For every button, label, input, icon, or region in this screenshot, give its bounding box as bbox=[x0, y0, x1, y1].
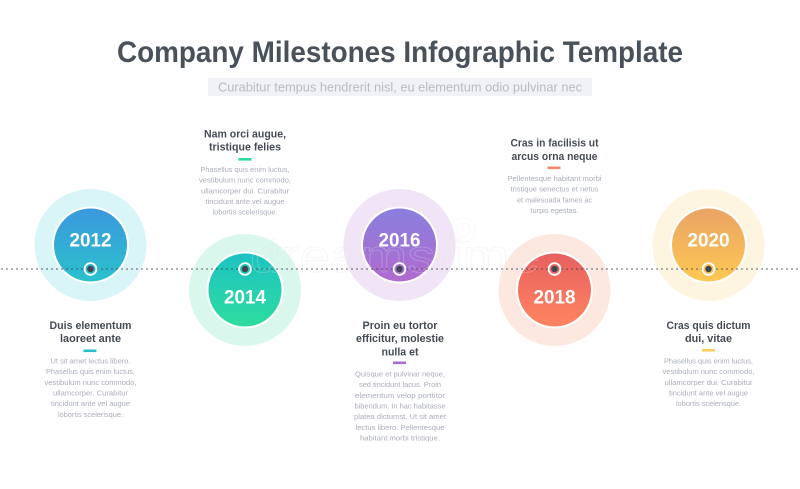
text block: 2018: arcus orna neque bbox=[512, 151, 598, 163]
text block: 2016: sed tincidunt lacus. Proin bbox=[359, 380, 441, 389]
text block: 2014: Nam orci augue, bbox=[204, 128, 286, 140]
text block: 2016: bibendum. In hac habitasse bbox=[354, 402, 446, 410]
watermark bbox=[250, 218, 540, 282]
text block: 2012: ullamcorper. Curabitur bbox=[53, 388, 129, 398]
milestone circle: 2020: 2020 bbox=[688, 231, 730, 252]
text block: 2014: Phasellus quis enim luctus, bbox=[200, 165, 290, 174]
text block: 2016: Quisque et pulvinar neque, bbox=[355, 370, 445, 378]
text block: 2018: turpis egestas. bbox=[530, 206, 578, 215]
text block: 2020: vestibulum nunc commodo, bbox=[662, 367, 754, 376]
text block: 2016: lectus libero. Pellentesque bbox=[356, 423, 444, 432]
text block: 2012: vestibulum nunc commodo, bbox=[44, 378, 136, 387]
text block: 2018: Cras in facilisis ut bbox=[510, 138, 599, 150]
text block: 2016 bbox=[354, 320, 446, 442]
text block: 2016: Proin eu tortor bbox=[362, 320, 438, 332]
milestone circle: 2018 bbox=[498, 234, 610, 346]
text block: 2020: Phasellus quis enim luctus, bbox=[664, 356, 753, 366]
text block: 2012 bbox=[44, 320, 136, 419]
text block: 2018: Pellentesque habitant morbi bbox=[508, 174, 602, 183]
milestone circle: 2018: 2018 bbox=[534, 288, 576, 308]
text block: 2020: ullamcorper dui. Curabitur bbox=[664, 378, 753, 387]
watermark: dreamstime bbox=[250, 230, 540, 282]
text block: 2020 bbox=[662, 320, 754, 408]
milestone circle: 2012 bbox=[34, 189, 146, 301]
text block: 2012: tincidunt ante vel augue bbox=[51, 399, 130, 408]
timeline marker: 2020 bbox=[702, 262, 715, 276]
text block: 2018 bbox=[508, 138, 602, 215]
text block: 2018: tristique senectus et netus bbox=[510, 185, 599, 194]
text block: 2012: Phasellus quis enim luctus, bbox=[46, 367, 135, 376]
timeline marker: 2018 bbox=[548, 262, 561, 276]
timeline marker: 2016 bbox=[393, 262, 406, 276]
text block: 2020: Cras quis dictum bbox=[666, 320, 750, 332]
timeline dotted line bbox=[2, 268, 800, 270]
text block: 2012: Duis elementum bbox=[50, 320, 132, 332]
text block: 2016: elementum velop porttitor bbox=[355, 391, 446, 400]
text block: 2016: platea dictumst. Ut sit amet bbox=[354, 412, 446, 421]
text block: 2014: lobortis scelerisque. bbox=[212, 208, 278, 217]
subtitle: Curabitur tempus hendrerit nisl, eu elementum odio pulvinar nec bbox=[218, 80, 582, 94]
text block: 2016: nulla et bbox=[382, 346, 419, 358]
milestone circle: 2014 bbox=[189, 234, 301, 346]
text block: 2012: lobortis scelerisque. bbox=[58, 410, 123, 419]
text block: 2014: tincidunt ante vel augue bbox=[206, 197, 284, 206]
milestone circle: 2016: 2016 bbox=[378, 231, 420, 252]
text block: 2014 bbox=[199, 128, 291, 217]
text block: 2016: habitant morbi tristique. bbox=[360, 434, 440, 442]
timeline marker: 2012 bbox=[84, 262, 97, 276]
timeline marker: 2014 bbox=[238, 262, 252, 276]
milestone circle: 2020 bbox=[652, 189, 764, 301]
milestone circle: 2012: 2012 bbox=[70, 231, 112, 252]
milestone circle: 2016 bbox=[344, 189, 456, 301]
text block: 2020: lobortis scelerisque. bbox=[676, 399, 741, 408]
title: Company Milestones Infographic Template bbox=[117, 36, 683, 69]
text block: 2014: ullamcorper dui. Curabitur bbox=[201, 186, 290, 195]
text block: 2020: tincidunt ante vel augue bbox=[669, 388, 748, 398]
text block: 2020: dui, vitae bbox=[685, 333, 732, 345]
text block: 2014: tristique felies bbox=[209, 142, 281, 154]
text block: 2012: laoreet ante bbox=[60, 333, 121, 345]
text block: 2014: vestibulum nunc commodo, bbox=[199, 176, 291, 185]
milestone circle: 2014: 2014 bbox=[224, 288, 266, 308]
text block: 2012: Ut sit amet lectus libero. bbox=[50, 356, 130, 366]
text block: 2016: efficitur, molestie bbox=[356, 333, 444, 345]
text block: 2018: et malesuada fames ac bbox=[517, 195, 592, 204]
